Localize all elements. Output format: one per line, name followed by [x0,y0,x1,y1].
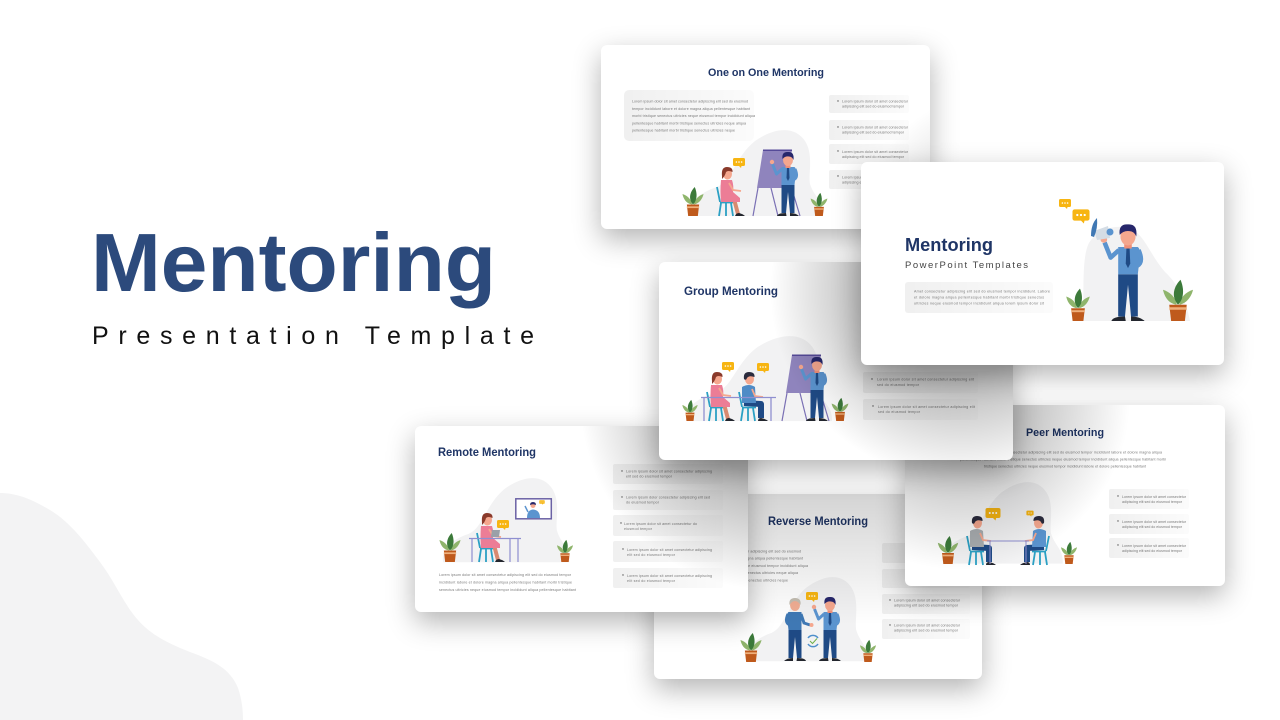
heading: Peer Mentoring [1026,427,1104,439]
illustration: group session at flipchart [682,336,848,421]
heading: Mentoring [905,234,993,255]
heading: One on One Mentoring [708,67,824,79]
text block [960,450,1166,468]
text block [439,573,576,592]
text block [683,550,808,582]
list of points: elit sed do eiusmod tempor [627,579,676,583]
text block: Lorem ipsum dolor sit amet consectetur adipiscing elit sed do eiusmod [632,100,748,104]
list of points: Lorem ipsum dolor consectetur adipiscing elit sed [626,496,710,500]
list of points: Lorem ipsum dolor sit amet consectetur adipiscing [626,470,712,474]
list of points: elit sed do eiusmod tempor [626,474,673,478]
list of points [882,543,970,639]
text block: et dolore magna aliqua pellentesque habitant morbi tristique senectus [914,296,1044,300]
list of points [613,464,723,588]
heading: Remote Mentoring [438,447,536,459]
panel: remote mentoring slide [415,426,748,612]
list of points: adipiscing elit sed do eiusmod tempor [842,180,905,184]
text block [905,282,1053,313]
text block: pellentesque habitant morbi tristique senectus ultricies neque aliqua [683,571,798,575]
text block: pellentesque habitant morbi tristique senectus ultricies neque [683,578,788,582]
text block: pellentesque habitant morbi tristique senectus ultricies neque [632,128,735,132]
panel: one on one mentoring slide [601,45,930,229]
text block: morbi tristique senectus ultricies neque eiusmod tempor incididunt aliqua [683,564,808,568]
text block: ultricies neque eiusmod tempor incididunt aliqua lorem ipsum dolor sit [914,302,1044,306]
list of points: adipiscing elit sed do eiusmod tempor [842,104,905,108]
heading: Reverse Mentoring [768,516,868,528]
list of points: adipiscing elit sed do eiusmod tempor [842,130,905,134]
panel: reverse mentoring slide [654,494,982,679]
main subtitle: Presentation Template [92,322,534,350]
list of points: Lorem ipsum dolor sit amet consectetur [842,126,909,130]
list of points: adipiscing elit sed do eiusmod tempor [1122,525,1183,529]
text block: Lorem ipsum dolor sit amet consectetur adipiscing elit sed do eiusmod tempor incididunt labore et dolore magna aliqua [960,450,1162,454]
text block: pellentesque habitant morbi tristique senectus ultricies neque aliqua [632,122,746,126]
list of points: Lorem ipsum dolor sit amet consectetur adipiscing elit [878,405,975,409]
list of points: adipiscing elit sed do eiusmod tempor [1122,500,1183,504]
list of points: Lorem ipsum dolor sit amet consectetur [1122,520,1187,524]
list of points: sed do eiusmod tempor [877,383,920,387]
list of points: eiusmod tempor [624,527,653,531]
list of points: elit sed do eiusmod tempor [627,553,676,557]
list of points: Lorem ipsum dolor sit amet consectetur [842,176,909,180]
list of points [863,372,978,420]
text block: Lorem ipsum dolor sit amet consectetur adipiscing elit sed do eiusmod [683,550,801,554]
list of points: adipiscing elit sed do eiusmod tempor [1122,549,1183,553]
text block: incididunt labore et dolore magna aliqua pellentesque habitant morbi tristique [439,580,572,584]
panel: peer mentoring slide [905,405,1225,586]
list of points: Lorem ipsum dolor sit amet consectetur [842,100,909,104]
list of points [1109,489,1189,558]
list of points: Lorem ipsum dolor sit amet consectetur [1122,495,1187,499]
text block: tempor incididunt labore et dolore magna aliqua pellentesque habitant [632,107,750,111]
text block: pellentesque habitant morbi tristique senectus ultricies neque eiusmod tempor incididunt aliqua pellentesque habitant morbi [960,458,1166,462]
main title: Mentoring [91,216,496,309]
panel: cover slide [861,162,1224,365]
list of points: sed do eiusmod tempor [878,410,921,414]
heading: Group Mentoring [684,286,778,298]
list of points: Lorem ipsum dolor sit amet consectetur [842,150,909,154]
list of points: Lorem ipsum dolor sit amet consectetur do [624,522,697,526]
text block: morbi tristique senectus ultricies neque eiusmod tempor incididunt aliqua [632,114,755,118]
list of points: Lorem ipsum dolor sit amet consectetur adipiscing [627,574,712,578]
list of points: Lorem ipsum dolor sit amet consectetur adipiscing elit [877,378,974,382]
panel: group mentoring slide [659,262,1013,460]
list of points: adipiscing elit sed do eiusmod tempor [894,604,959,608]
text block: Lorem ipsum dolor sit amet consectetur adipiscing elit sed do eiusmod tempor [439,573,572,577]
illustration: remote video session [439,478,573,562]
text block: tempor incididunt labore et dolore magna aliqua pellentesque habitant [683,556,803,560]
subheading: PowerPoint Templates [905,260,1028,271]
list of points: adipiscing elit sed do eiusmod tempor [894,628,959,632]
list of points: Lorem ipsum dolor sit amet consectetur [894,598,961,602]
illustration: older and younger colleague [740,577,876,662]
list of points: Lorem ipsum dolor sit amet consectetur adipiscing [627,548,712,552]
list of points: Lorem ipsum dolor sit amet consectetur [894,624,961,628]
illustration: two peers at a table [938,482,1077,565]
illustration: man with megaphone [1059,199,1193,321]
text block: Amet consectetur adipiscing elit sed do eiusmod tempor incididunt. Labore [914,290,1050,294]
list of points [829,95,909,189]
list of points: do eiusmod tempor [626,500,660,504]
text block: tristique senectus ultricies neque eiusmod tempor incididunt labore et dolore pellentesque habitant [984,464,1146,468]
illustration: mentor and mentee at flipchart [682,130,827,216]
decorative corner blob [0,493,243,720]
text block [624,90,755,141]
list of points: adipiscing elit sed do eiusmod tempor [842,155,905,159]
list of points: Lorem ipsum dolor sit amet consectetur [1122,544,1187,548]
text block: senectus ultricies neque eiusmod tempor incididunt aliqua pellentesque habitant [439,588,576,592]
